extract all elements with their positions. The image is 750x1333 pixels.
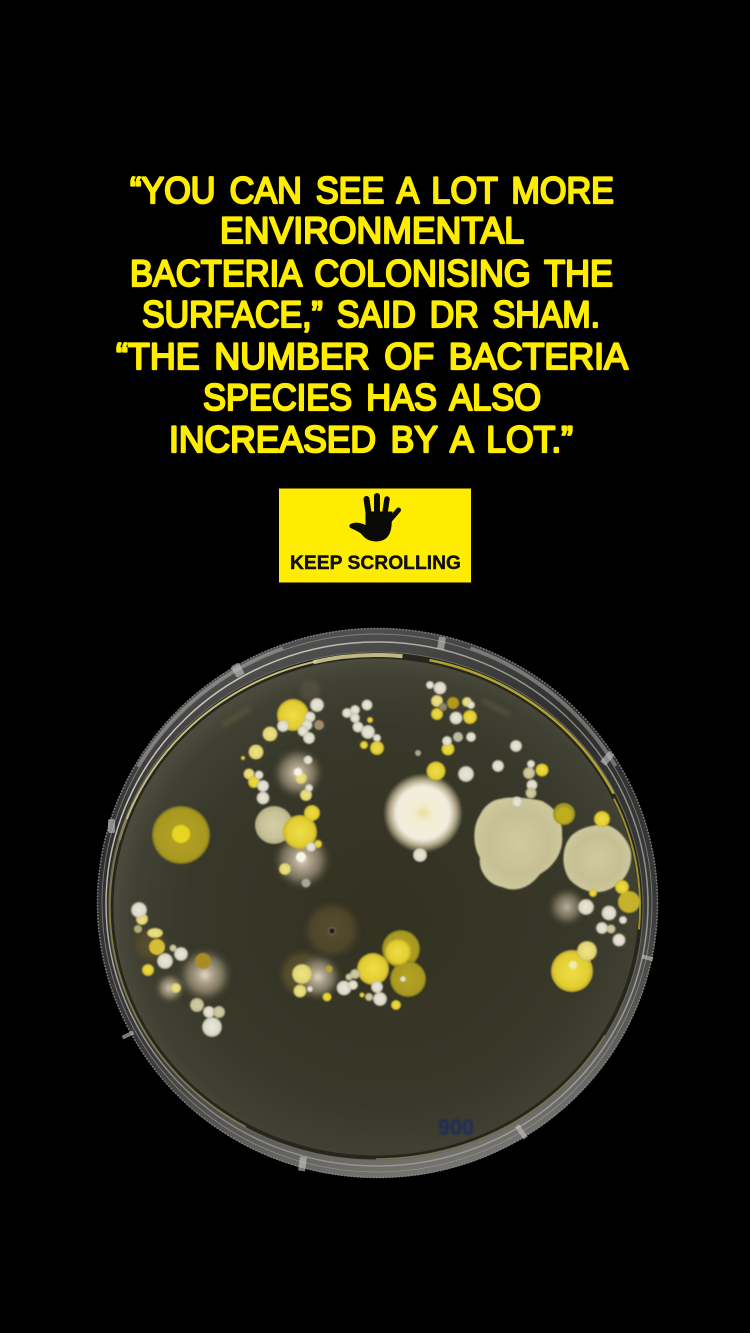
title quote <box>116 169 628 460</box>
petri dish photo <box>97 628 658 1178</box>
bright edge highlights <box>100 632 654 1174</box>
quote line 2: ENVIRONMENTAL <box>220 209 524 251</box>
quote line 3: BACTERIA COLONISING THE <box>130 252 613 294</box>
white colonies <box>131 681 627 1037</box>
large white colony <box>384 774 462 852</box>
quote line 5: “THE NUMBER OF BACTERIA <box>116 335 628 377</box>
icon: raised hand <box>350 496 398 541</box>
agar surface <box>114 658 638 1156</box>
quote line 4: SURFACE,” SAID DR SHAM. <box>142 293 600 335</box>
quote line 7: INCREASED BY A LOT.” <box>169 418 573 460</box>
dish rim <box>97 628 658 1178</box>
quote line 1: “YOU CAN SEE A LOT MORE <box>130 169 614 211</box>
large cream colonies <box>255 798 631 892</box>
handwritten blue dish mark: 900 <box>438 1114 474 1140</box>
left halo colony <box>152 806 210 864</box>
keep scrolling badge <box>279 488 471 582</box>
bacterial colonies <box>131 680 640 1037</box>
quote line 6: SPECIES HAS ALSO <box>203 376 541 418</box>
dish tabs <box>108 637 653 1171</box>
button label: KEEP SCROLLING <box>290 552 461 574</box>
yellow colonies <box>136 695 640 1010</box>
diffuse fuzzy colonies <box>132 680 586 1003</box>
